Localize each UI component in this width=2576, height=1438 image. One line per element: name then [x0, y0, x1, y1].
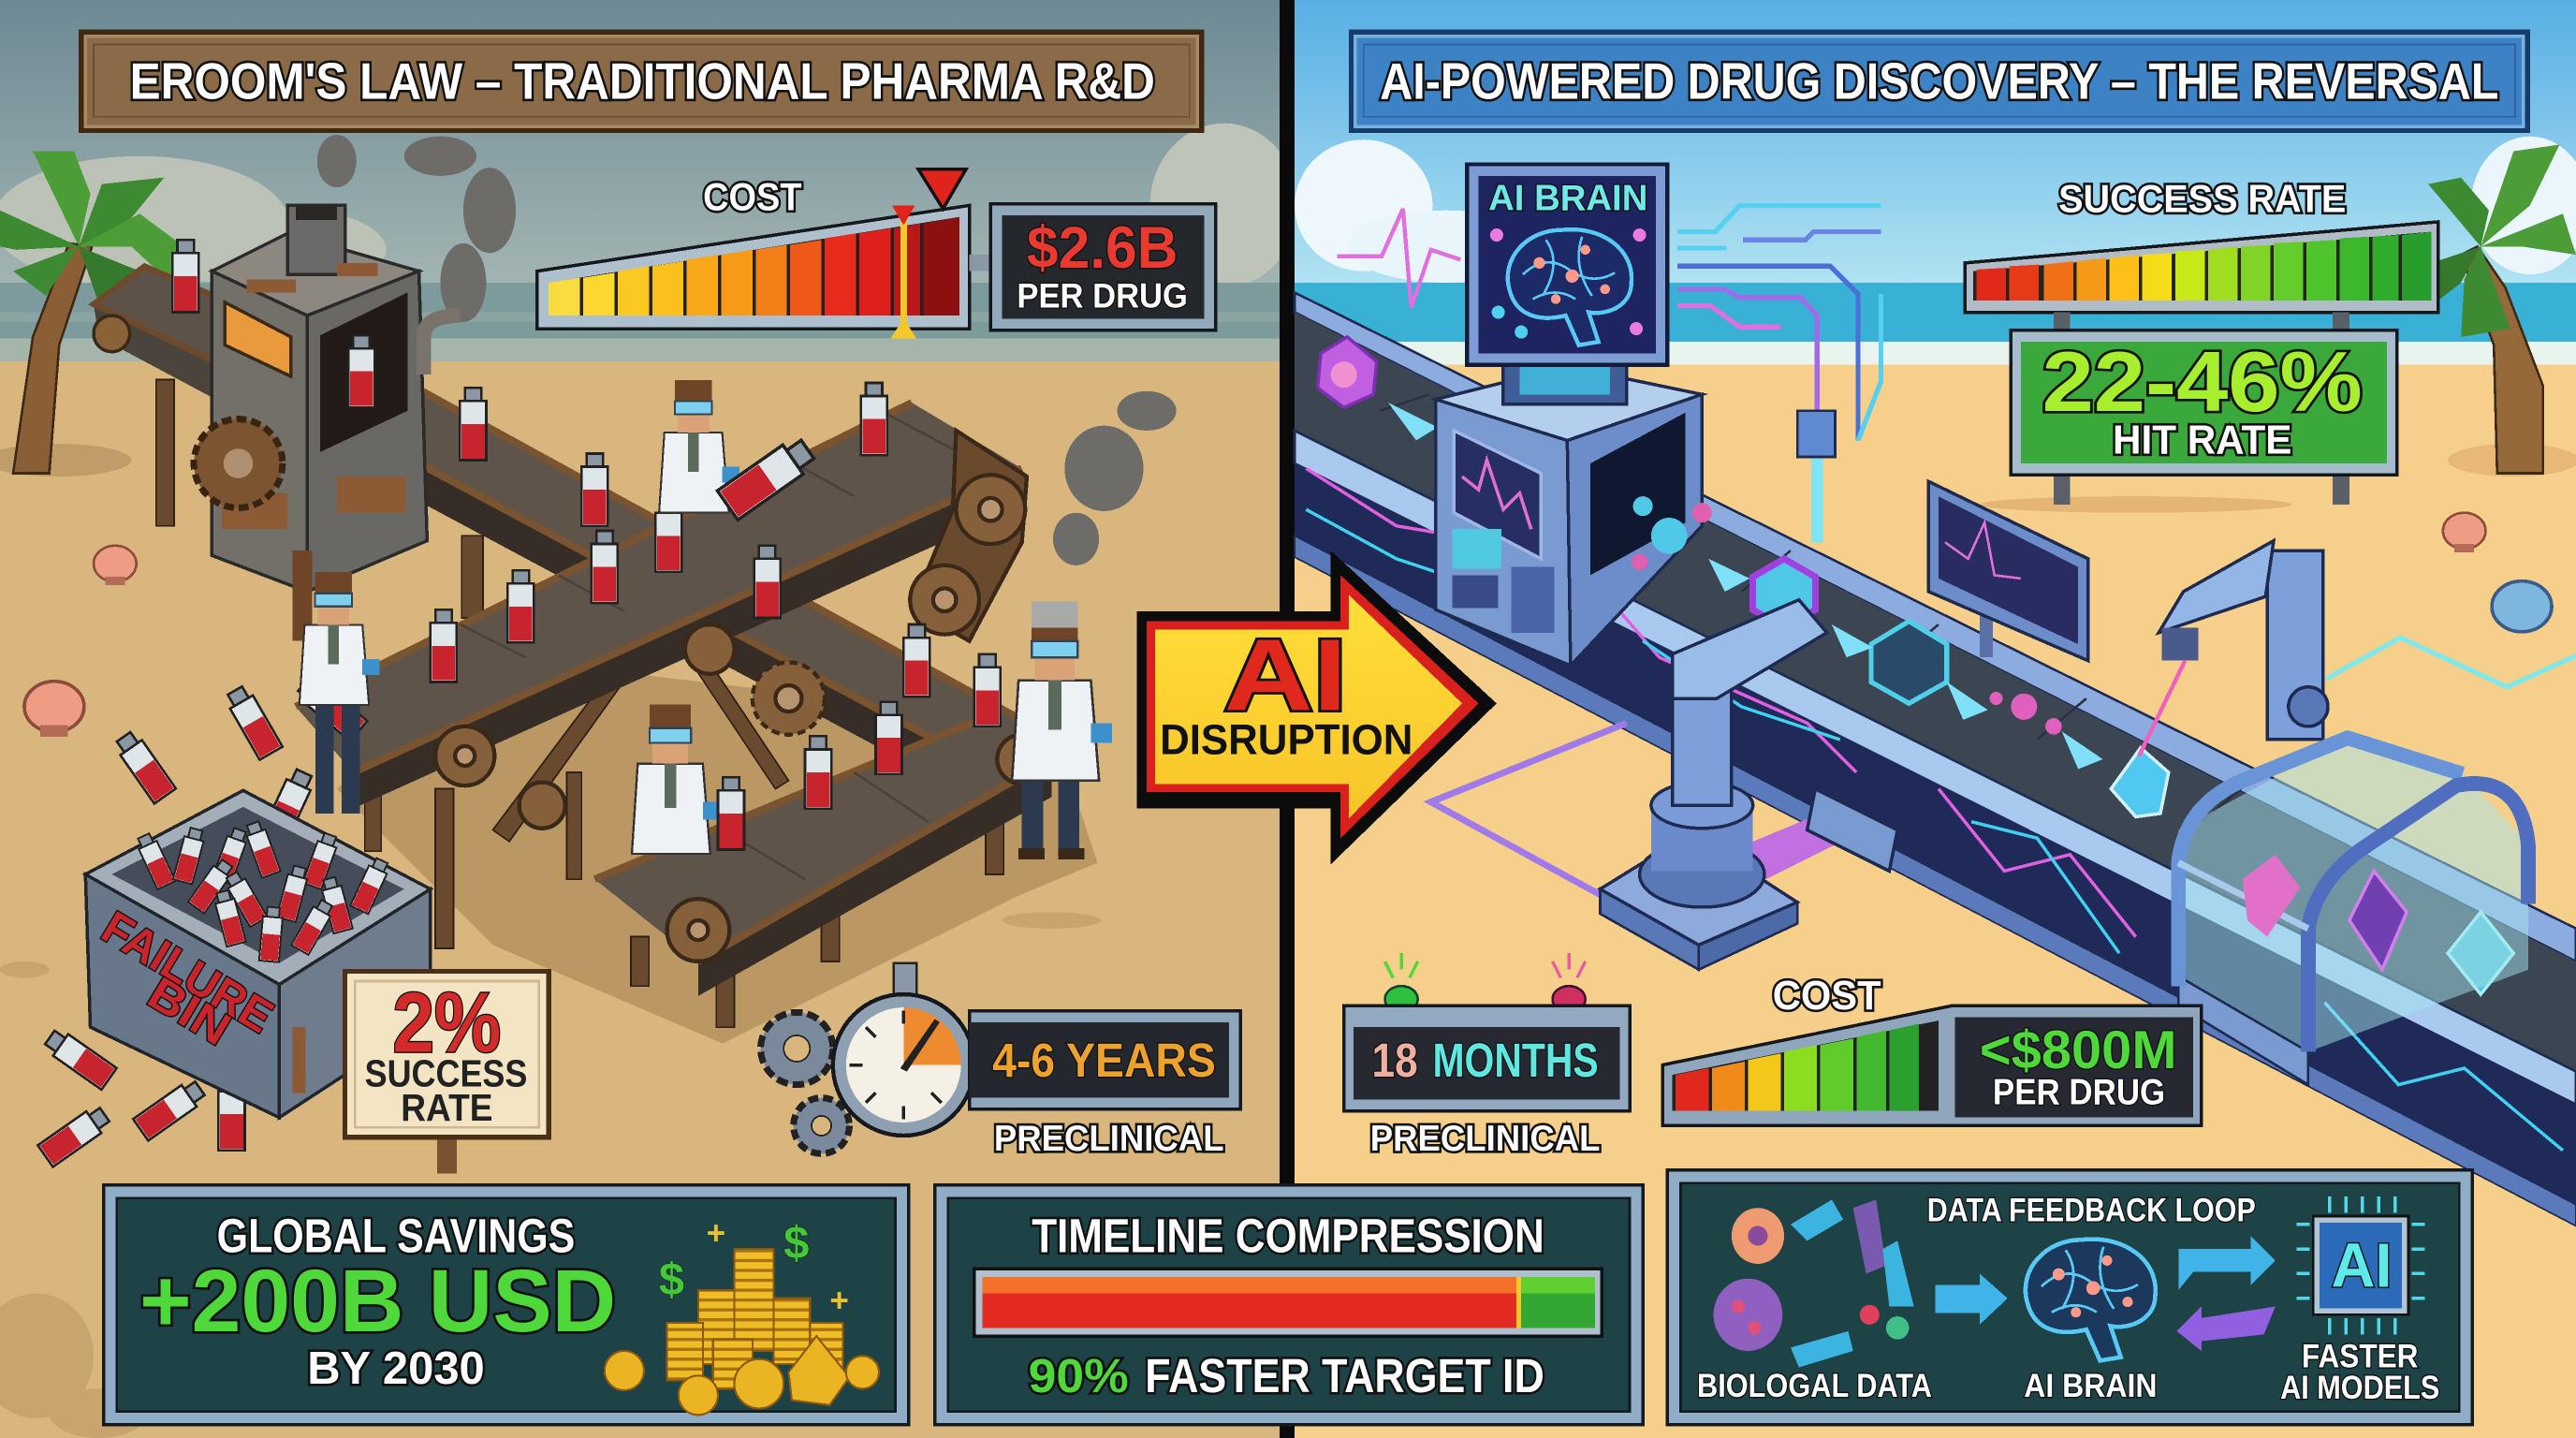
- icon: sand shells left: [24, 546, 137, 737]
- chart: success rate gauge: SUCCESS RATE: [2058, 176, 2346, 220]
- panel: global savings: GLOBAL SAVINGS: [217, 1210, 575, 1263]
- icon: left palm tree: [0, 151, 184, 474]
- callout: 2% success rate sign: SUCCESS: [365, 1051, 527, 1094]
- title: Eroom's law header: EROOM'S LAW – TRADITIONAL PHARMA R&D: [130, 52, 1155, 110]
- callout: $2.6B per drug: PER DRUG: [1017, 276, 1188, 315]
- rollers and gears: [435, 431, 1046, 961]
- icon: scientist top: [659, 380, 818, 520]
- icon: AI brain display: AI BRAIN: [1488, 179, 1647, 219]
- panel: data feedback loop: AI MODELS: [2280, 1370, 2439, 1406]
- panel: global savings: +200B USD: [139, 1252, 616, 1351]
- icon: zigzag signal: [2326, 638, 2576, 687]
- icon: dollar sparks: $: [659, 1255, 684, 1305]
- icon: AI brain display: [1467, 165, 1667, 404]
- icon: dollar sparks: $: [783, 1219, 810, 1269]
- arrow: AI disruption: AI: [1224, 618, 1347, 732]
- icon: loop arrows: [2177, 1236, 2276, 1351]
- callout: 18 months preclinical: PRECLINICAL: [1370, 1119, 1600, 1159]
- panel: timeline compression: [935, 1185, 1643, 1425]
- icon: dollar sparks: [659, 1215, 849, 1319]
- chart: low cost gauge: COST: [1773, 973, 1881, 1019]
- illustration: rusted machine: [194, 205, 460, 592]
- belt B: [296, 403, 1022, 809]
- illustration: AI conveyor belt: [1295, 292, 2576, 1226]
- text: failure label: BIN: [139, 968, 239, 1055]
- icon: coin pile: [605, 1249, 879, 1415]
- callout: 2% success rate sign: 2%: [392, 975, 501, 1070]
- flow arrows on belt: [1388, 403, 2103, 770]
- callout: 18 months preclinical: [1344, 953, 1630, 1159]
- panel: global savings: [104, 1185, 909, 1425]
- molecules on belt: [1318, 337, 2513, 994]
- icon: small AI brain: [2026, 1240, 2156, 1360]
- icon: robot arm right: [2139, 541, 2328, 756]
- panel: data feedback loop: DATA FEEDBACK LOOP: [1927, 1192, 2256, 1228]
- arrow: AI disruption: [1137, 550, 1497, 864]
- panel: global savings: BY 2030: [307, 1343, 485, 1394]
- icon: failure bin: [85, 790, 431, 1118]
- illustration: AI machine: [1436, 366, 1712, 666]
- arrow: AI disruption: DISRUPTION: [1160, 716, 1412, 764]
- callout: 2% success rate sign: RATE: [401, 1086, 493, 1129]
- panel: data feedback loop: [1667, 1170, 2472, 1425]
- neon circuit traces: [1306, 468, 2563, 1151]
- callout: 22-46% hit rate board: [2011, 313, 2397, 505]
- title: AI discovery header: [1349, 30, 2530, 133]
- icon: scientist right: [1012, 601, 1112, 859]
- icon: scientist left: [292, 550, 379, 814]
- chart: cost gauge rising: [537, 169, 970, 339]
- chart: cost gauge rising: COST: [703, 175, 802, 219]
- panel: AI discovery background: [1295, 0, 2576, 1438]
- belt C: [594, 710, 1051, 996]
- chart: low cost gauge: PER DRUG: [1993, 1073, 2165, 1113]
- callout: 2% success rate sign: [345, 971, 549, 1173]
- belt behind machine: [94, 266, 222, 403]
- chart: compression bar: [974, 1269, 1602, 1336]
- text: failure label: FAILURE: [94, 902, 281, 1043]
- icon: purple floor cables: [1431, 723, 1627, 896]
- callout: $2.6B per drug: $2.6B: [1027, 215, 1178, 281]
- icon: AI chip: AI: [2331, 1231, 2392, 1301]
- title: Eroom's law header: [79, 30, 1204, 133]
- callout: $2.6B per drug: [970, 204, 1216, 330]
- callout: 4-6 years preclinical: PRECLINICAL: [994, 1119, 1224, 1159]
- callout: 18 months preclinical: 18: [1372, 1034, 1418, 1087]
- callout: 22-46% hit rate board: HIT RATE: [2113, 417, 2291, 462]
- illustration: rusty conveyor system: [94, 266, 1097, 1044]
- panel: traditional pharma background: [0, 0, 1298, 1438]
- icon: side monitor: [1928, 481, 2088, 661]
- panel: data feedback loop: BIOLOGAL DATA: [1697, 1368, 1932, 1404]
- icon: scientist bottom: [632, 704, 744, 854]
- icon: dollar sparks: +: [829, 1283, 849, 1319]
- panel: timeline compression: TIMELINE COMPRESSION: [1032, 1210, 1544, 1263]
- icon: glass scanner tunnel: [2178, 738, 2528, 1085]
- icon: neural wires and nozzles: [1677, 205, 1881, 542]
- icon: biological data cycle: [1714, 1199, 2008, 1368]
- icon: dollar sparks: +: [707, 1215, 725, 1252]
- icon: smoke plumes: [317, 135, 1177, 565]
- icon: right palm tree: [2407, 144, 2576, 474]
- callout: 18 months preclinical: MONTHS: [1432, 1034, 1599, 1087]
- chart: success rate gauge: [1965, 176, 2438, 313]
- divider: [1280, 0, 1295, 1438]
- callout: 22-46% hit rate board: 22-46%: [2042, 334, 2363, 430]
- panel: data feedback loop: AI BRAIN: [2024, 1368, 2157, 1404]
- icon: heartbeat line: [1338, 209, 1460, 307]
- callout: 4-6 years preclinical: [970, 1011, 1240, 1159]
- chart: low cost gauge: <$800M: [1980, 1020, 2177, 1080]
- icons: red vials on conveyors: [37, 240, 1001, 1167]
- panel: timeline compression: 90%: [1029, 1349, 1129, 1402]
- icon: robot arm left: [1600, 600, 1897, 970]
- icon: sand shells right: [2443, 513, 2552, 632]
- icon: AI chip: [2297, 1196, 2425, 1334]
- icon: nozzle: [1797, 411, 1835, 457]
- panel: timeline compression: FASTER TARGET ID: [1145, 1349, 1544, 1402]
- molecule in doorway: [1632, 496, 1712, 570]
- panel: data feedback loop: FASTER: [2302, 1339, 2419, 1375]
- icon: stopwatch with gears: [761, 963, 974, 1153]
- callout: 4-6 years preclinical: 4-6 YEARS: [992, 1034, 1216, 1087]
- belt A: [324, 372, 1051, 814]
- chart: low cost gauge: [1662, 973, 2202, 1125]
